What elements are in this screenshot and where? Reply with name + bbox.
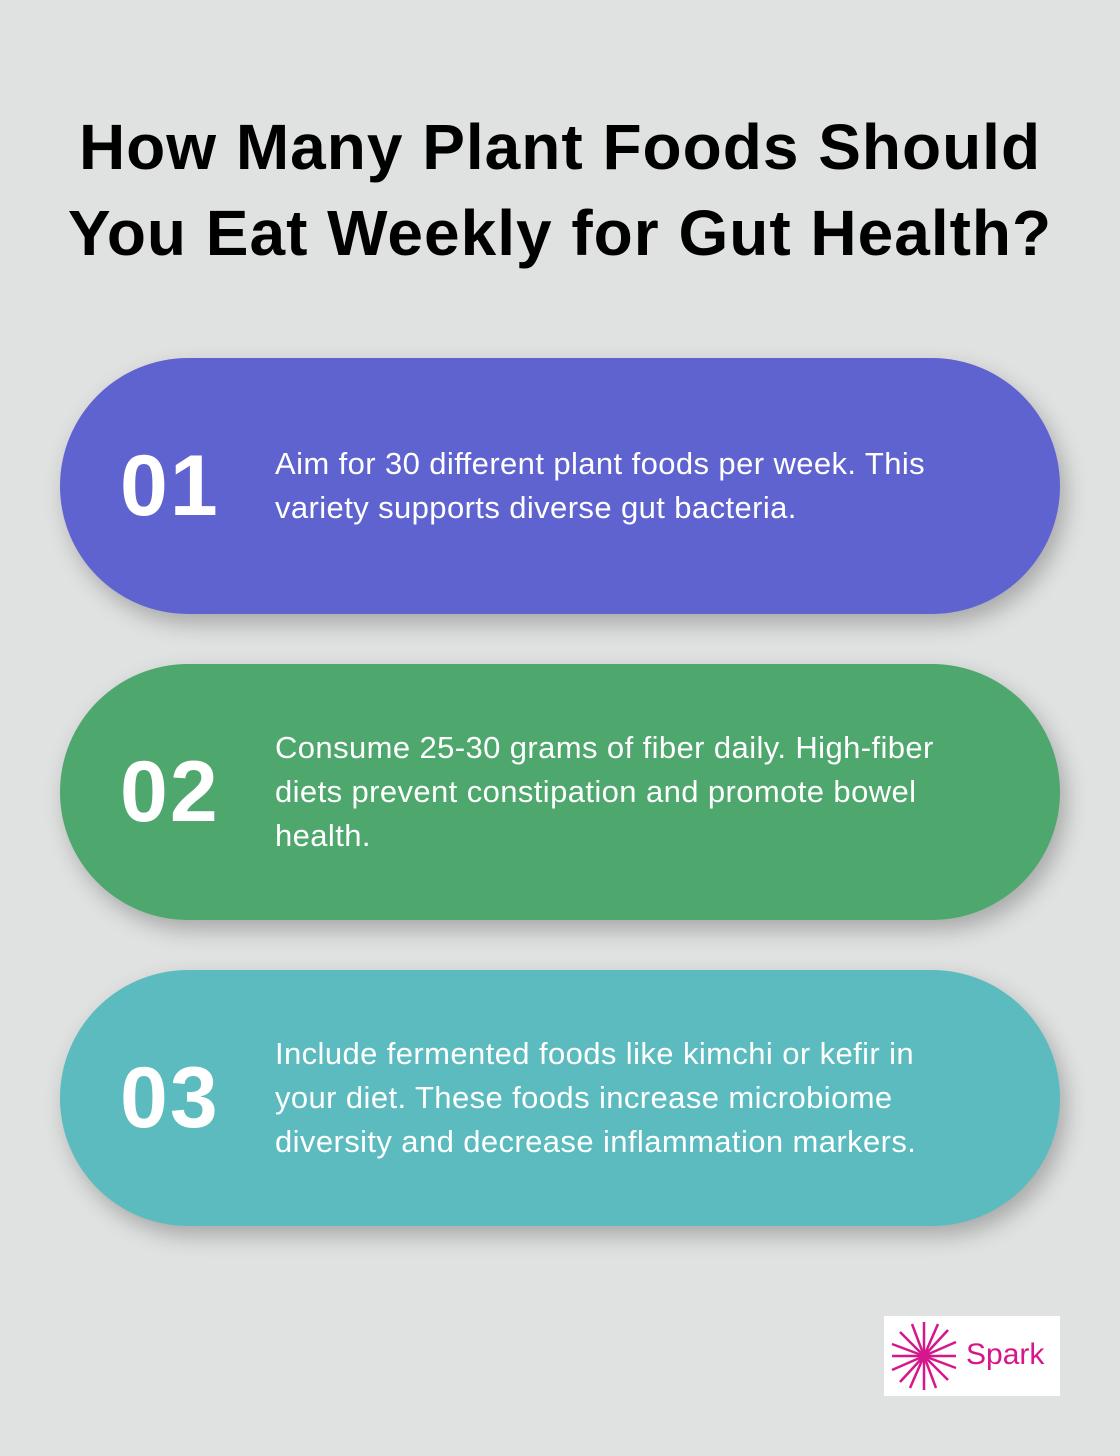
number 01: 01 — [120, 438, 220, 534]
title: How Many Plant Foods Should — [79, 111, 1041, 183]
text 1: Aim for 30 different plant foods per week. This variety supports diverse gut bacteria. — [275, 446, 925, 525]
title — [68, 111, 1052, 269]
card 1 — [60, 358, 1060, 614]
card 3 — [60, 970, 1060, 1226]
number 02: 02 — [120, 744, 220, 840]
text 3: Include fermented foods like kimchi or kefir in your diet. These foods increase microbiome diversity and decrease inflammation markers. — [275, 1036, 916, 1159]
text 2: Consume 25-30 grams of fiber daily. High-fiber diets prevent constipation and promote bowel health. — [275, 730, 934, 853]
number 03: 03 — [120, 1050, 220, 1146]
icon: spark burst — [892, 1322, 956, 1390]
title: You Eat Weekly for Gut Health? — [68, 197, 1052, 269]
card 2 — [60, 664, 1060, 920]
logo — [884, 1316, 1060, 1396]
logo text: Spark — [966, 1338, 1044, 1371]
